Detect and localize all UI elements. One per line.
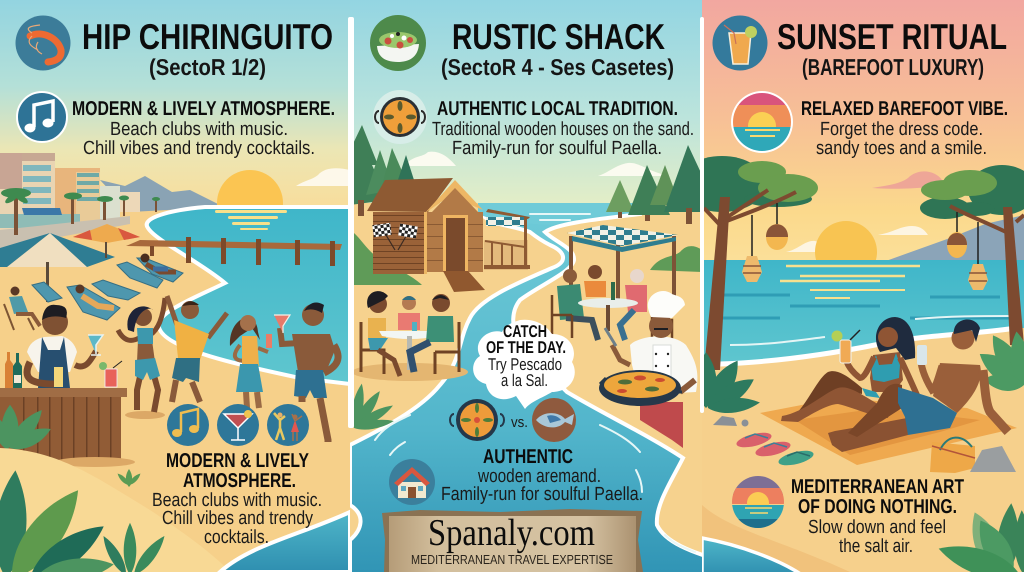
icon: sunset badge, lower — [730, 475, 786, 531]
palm trees — [1, 188, 160, 235]
speech bubble: catch of the day: Try Pescado — [488, 355, 562, 374]
man — [828, 319, 1008, 452]
umbrella: orange and red — [73, 224, 140, 258]
seated beach guest — [4, 286, 40, 330]
hanging lanterns — [742, 203, 988, 290]
text block: modern and lively, lower — [152, 450, 322, 548]
pine trees, left — [350, 125, 414, 216]
dancer: woman in teal — [118, 298, 165, 419]
sea with shoreline — [147, 207, 350, 384]
text block: modern and lively, lower: cocktails. — [204, 527, 269, 548]
beach bag and rock — [930, 438, 1016, 473]
dancer: woman with cocktail — [230, 315, 272, 408]
text block: authentic local tradition: Traditional wooden houses on the sand. — [432, 119, 694, 140]
bartender — [27, 305, 103, 388]
text block: modern and lively: Chill vibes and trendy cocktails. — [83, 138, 315, 159]
title: rustic shack: RUSTIC SHACK — [452, 16, 665, 57]
dancer: man in yellow — [167, 296, 227, 402]
icon: dancers badge — [267, 404, 309, 446]
icon: paella vs fish: vs. — [511, 414, 528, 431]
text block: modern and lively, lower: Chill vibes and trendy — [162, 508, 313, 529]
icon: paella vs fish — [450, 398, 576, 442]
speech bubble: catch of the day: a la Sal. — [501, 371, 548, 390]
text block: authentic: AUTHENTIC — [483, 446, 573, 468]
text block: modern and lively: MODERN & LIVELY ATMOSPHERE. — [72, 98, 335, 120]
subtitle: sector 1/2: (SectoR 1/2) — [149, 54, 266, 80]
icon: drink badge — [712, 16, 768, 70]
sun — [217, 170, 283, 205]
panel: sunset ritual — [678, 0, 1024, 572]
diners under canopy — [552, 265, 672, 340]
icon: music badge — [17, 92, 67, 142]
shoreline — [720, 328, 1016, 364]
plant behind bar — [0, 405, 51, 450]
speech bubble: catch of the day: CATCH — [503, 322, 547, 341]
setting sun — [815, 221, 877, 283]
tree, left — [678, 156, 818, 370]
text block: art of doing nothing: MEDITERRANEAN ART — [791, 476, 964, 498]
subtitle: sector 4: (SectoR 4 - Ses Casetes) — [441, 54, 674, 80]
pink cloud — [872, 171, 950, 189]
text block: art of doing nothing: Slow down and feel — [808, 517, 946, 538]
river highlights — [375, 214, 695, 552]
text block: authentic local tradition: AUTHENTIC LOCAL TRADITION. — [437, 98, 678, 120]
pine trees, right — [606, 145, 702, 224]
divider: right — [700, 17, 704, 413]
parchment logo: Spanaly.com — [428, 512, 595, 554]
speech bubble: catch of the day — [473, 320, 575, 409]
rocks — [713, 416, 748, 426]
text block: relaxed barefoot vibe: sandy toes and a smile. — [816, 138, 987, 159]
text block: modern and lively, lower: MODERN & LIVELY — [166, 450, 310, 472]
text block: modern and lively, lower: ATMOSPHERE. — [183, 470, 296, 492]
text block: art of doing nothing — [791, 476, 964, 557]
text block: modern and lively, lower: Beach clubs with music. — [152, 490, 322, 511]
sea reflections — [720, 266, 1012, 345]
bar counter — [0, 388, 135, 467]
chef with paella — [605, 291, 697, 448]
tree, right — [920, 165, 1024, 345]
text block: relaxed barefoot vibe — [801, 98, 1008, 159]
buildings — [0, 153, 140, 248]
flip flops — [735, 430, 815, 468]
icon: shrimp badge — [16, 16, 70, 70]
lighter dune — [0, 448, 230, 572]
mountain — [883, 215, 1024, 262]
wave, bottom right — [220, 512, 350, 572]
sun loungers — [32, 258, 183, 320]
pier — [126, 237, 342, 266]
icon: cloud — [296, 168, 350, 186]
beach towel — [760, 398, 1017, 465]
text block: modern and lively — [72, 98, 335, 159]
plants, bottom left — [0, 469, 169, 572]
text block: authentic: wooden aremand. — [477, 466, 601, 487]
lounger guest — [76, 284, 114, 308]
man with martini — [274, 303, 338, 442]
plants, bottom right — [935, 502, 1024, 572]
text block: authentic local tradition — [432, 98, 694, 159]
text block: authentic: Family-run for soulful Paella. — [441, 484, 643, 505]
plant, right — [974, 330, 1024, 394]
bottles and cocktail — [5, 352, 122, 388]
text block: art of doing nothing: the salt air. — [839, 536, 913, 557]
panel: rustic shack — [350, 0, 702, 572]
parchment logo — [382, 509, 643, 572]
darker sand curve — [702, 505, 850, 572]
divider: left — [348, 17, 354, 428]
parchment logo: MEDITERRANEAN TRAVEL EXPERTISE — [411, 552, 613, 567]
icon: paella badge — [373, 90, 427, 144]
icon: sunset badge — [730, 90, 794, 153]
canopy dining — [567, 225, 678, 302]
title: hip chiringuito: HIP CHIRINGUITO — [82, 16, 333, 57]
icon: house badge — [389, 459, 435, 505]
river — [350, 212, 702, 572]
text block: authentic — [441, 446, 643, 505]
porch — [443, 209, 530, 292]
clouds — [405, 152, 670, 176]
mountains — [100, 176, 224, 212]
text block: modern and lively: Beach clubs with music. — [110, 119, 288, 140]
text block: authentic local tradition: Family-run for soulful Paella. — [452, 138, 662, 159]
shrubs — [354, 233, 702, 285]
white clouds — [786, 226, 928, 252]
plant, left — [696, 352, 761, 416]
woman — [781, 317, 917, 422]
speech bubble: catch of the day: OF THE DAY. — [486, 338, 566, 357]
text block: relaxed barefoot vibe: Forget the dress code. — [820, 119, 983, 140]
sea — [702, 260, 1024, 365]
sun reflection — [215, 210, 287, 230]
text block: art of doing nothing: OF DOING NOTHING. — [798, 496, 957, 518]
sea at horizon — [478, 203, 632, 217]
umbrella: blue and cream — [0, 233, 115, 302]
sunbather — [140, 254, 176, 272]
family at table — [352, 291, 468, 381]
shack — [367, 178, 483, 274]
plant near table — [349, 383, 395, 432]
icon: martini badge — [217, 404, 259, 446]
paella pan — [599, 370, 682, 406]
icon: music note badge — [167, 404, 209, 446]
checkered flags — [372, 223, 418, 250]
panel: hip chiringuito — [0, 0, 350, 572]
wave, bottom left — [702, 538, 802, 572]
icon: salad badge — [370, 15, 426, 71]
